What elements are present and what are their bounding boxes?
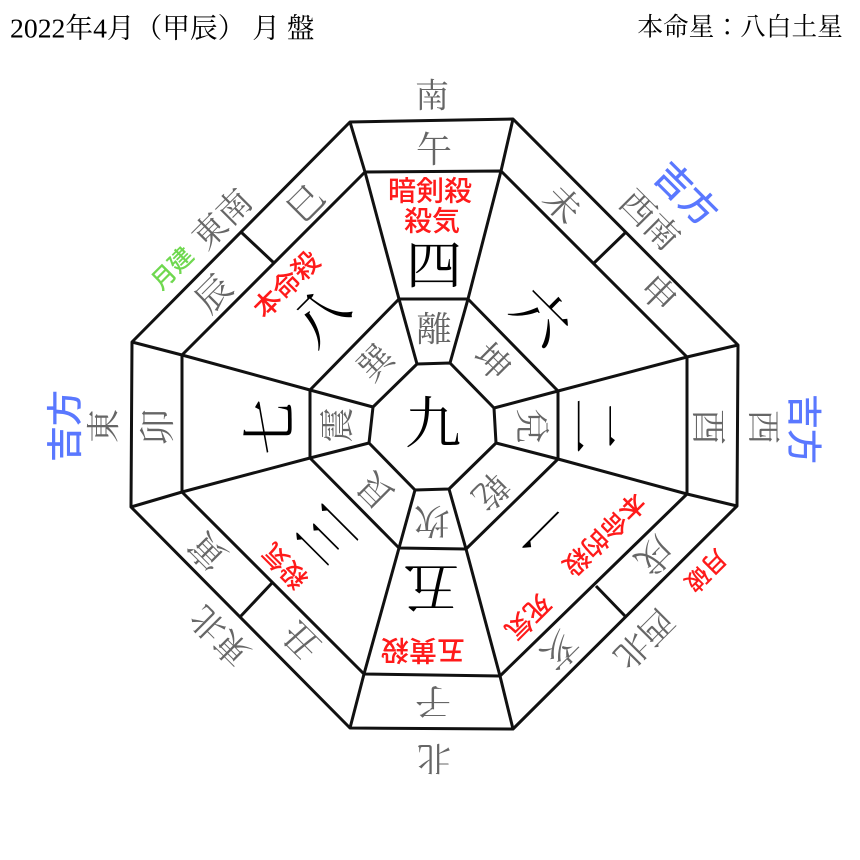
zodiac branch labels: 酉 — [688, 409, 728, 445]
trigram labels: 震 — [318, 407, 358, 443]
star numbers: 九 — [405, 394, 461, 456]
green monthly label: 月建 — [146, 242, 200, 296]
star numbers: 一 — [495, 484, 579, 568]
star numbers: 七 — [241, 399, 303, 455]
star numbers: 八 — [280, 276, 364, 360]
middle octagon — [182, 171, 687, 676]
red misfortune labels: 月破 — [678, 543, 732, 597]
lucky direction labels: 吉方 — [646, 154, 726, 234]
trigram labels: 坤 — [466, 336, 518, 388]
trigram labels: 兌 — [512, 408, 550, 444]
star numbers: 六 — [498, 276, 582, 360]
natal star label: 本命星：八白土星 — [637, 12, 843, 42]
red misfortune labels: 殺気 — [404, 206, 460, 236]
red misfortune labels: 暗剣殺 — [388, 176, 472, 206]
center octagon — [369, 363, 496, 490]
outer octagon — [131, 119, 738, 729]
star numbers: 五 — [403, 554, 459, 616]
direction labels: 西 — [744, 410, 780, 444]
direction labels: 南 — [415, 78, 449, 116]
title: 2022年4月（甲辰） 月 盤 — [10, 12, 315, 44]
trigram labels — [318, 310, 550, 540]
trigram labels: 乾 — [464, 465, 516, 517]
star numbers — [241, 236, 623, 616]
red misfortune labels: 本命的殺 — [557, 487, 651, 581]
zodiac branch labels: 丑 — [275, 613, 329, 667]
chart: octagonal direction board — [44, 78, 822, 776]
trigram labels: 坎 — [414, 500, 450, 540]
zodiac branch labels: 戌 — [627, 528, 681, 582]
direction labels: 北 — [417, 738, 451, 776]
direction labels: 東南 — [185, 182, 260, 257]
zodiac branch labels: 申 — [631, 267, 685, 321]
zodiac branch labels: 子 — [415, 681, 451, 721]
direction labels — [86, 78, 780, 776]
zodiac branch labels — [138, 130, 728, 721]
trigram labels: 艮 — [350, 464, 402, 516]
zodiac branch labels: 午 — [416, 130, 452, 170]
direction labels: 西南 — [612, 183, 687, 258]
lucky direction labels: 吉方 — [44, 390, 86, 462]
direction labels: 東 — [86, 409, 124, 443]
radial spokes and zodiac dividers — [131, 119, 738, 729]
direction labels: 西北 — [606, 601, 680, 675]
lucky direction labels: 吉方 — [784, 394, 822, 464]
zodiac branch labels: 巳 — [279, 177, 333, 231]
direction labels: 東北 — [183, 598, 258, 673]
trigram labels: 離 — [416, 310, 452, 350]
star numbers: 四 — [406, 236, 462, 298]
red misfortune labels: 五黄殺 — [381, 634, 465, 666]
trigram labels: 巽 — [350, 336, 403, 389]
red misfortune labels: 本命殺 — [248, 246, 326, 324]
zodiac branch labels: 卯 — [138, 409, 178, 445]
star numbers: 三 — [286, 492, 370, 576]
zodiac branch labels: 亥 — [532, 623, 586, 677]
red misfortune labels: 死気 — [499, 588, 557, 646]
zodiac branch labels: 辰 — [187, 267, 241, 321]
red misfortune labels: 殺気 — [256, 537, 314, 595]
zodiac branch labels: 寅 — [180, 523, 235, 578]
red misfortune labels — [248, 176, 732, 666]
star numbers: 二 — [561, 398, 623, 454]
lucky direction labels — [44, 154, 822, 464]
zodiac branch labels: 未 — [535, 178, 589, 232]
ring octagon — [310, 299, 558, 549]
